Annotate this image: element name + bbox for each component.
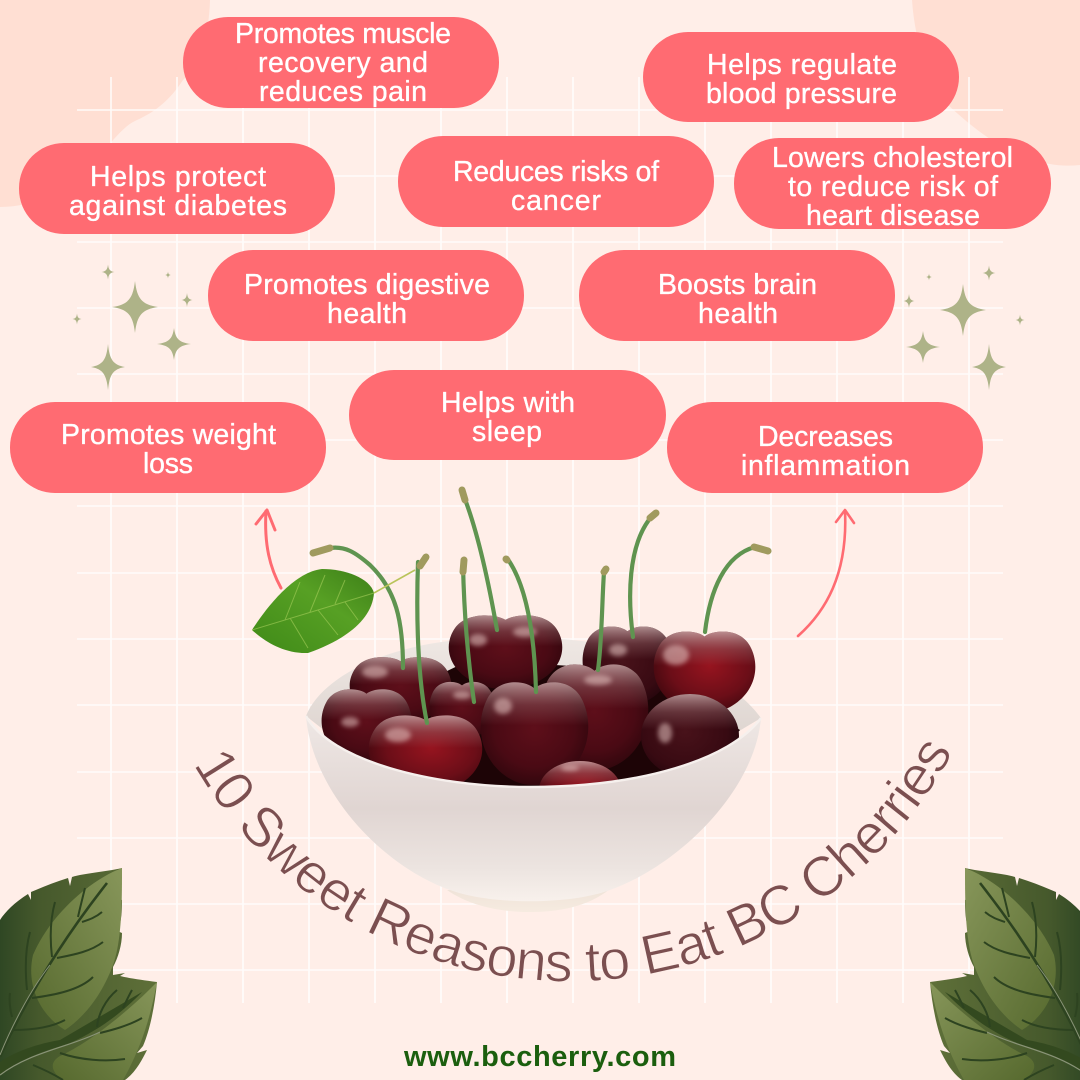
pill: diabetes: against diabetes [69,190,287,222]
pill: muscle recovery [183,17,499,108]
cherries [322,615,755,819]
bowl rim highlight [306,716,761,787]
cherry leaf [252,569,415,653]
big leaves: bottom left [0,868,157,1080]
bowl of cherries [306,615,761,912]
pill: cancer [398,136,714,227]
pill: sleep: Helps with [441,387,575,419]
pill: cholesterol: heart disease [806,200,980,232]
website url: www.bccherry.com [403,1041,676,1073]
pill: muscle recovery: reduces pain [259,76,427,108]
sparkles: right cluster [904,266,1024,390]
pill: inflammation: inflammation [741,450,910,482]
pill: cancer: cancer [511,185,602,217]
pill: inflammation [667,402,983,493]
pill: digestive [208,250,524,341]
pill: digestive: health [327,298,407,330]
decorative blob: top left [0,0,210,207]
pill: sleep [349,370,666,460]
dark gap between cherries [345,660,740,792]
arrow: left [256,510,281,588]
curved title: 10 Sweet Reasons to Eat BC Cherries [196,742,949,982]
pill: muscle recovery: recovery and [258,47,428,79]
pill: blood pressure: blood pressure [706,78,897,110]
pill: cholesterol: Lowers cholesterol [772,142,1013,174]
pill: cholesterol [734,138,1051,232]
pill: brain [579,250,895,341]
pill: digestive: Promotes digestive [244,269,490,301]
arrow: right [798,510,854,636]
pill: brain: health [698,298,778,330]
bowl body [306,716,761,901]
pill: muscle recovery: Promotes muscle [235,18,451,50]
pill: blood pressure [643,32,959,122]
pill: sleep: sleep [472,416,542,448]
pill: brain: Boosts brain [658,269,817,301]
cherry stems [313,490,768,723]
pill: weight loss [10,402,326,493]
pill: inflammation: Decreases [758,421,893,453]
cherry highlights [341,627,689,771]
bowl foot [447,888,611,912]
pill: weight loss: Promotes weight [61,419,276,451]
pill: weight loss: loss [143,448,193,480]
pill: diabetes: Helps protect [90,161,266,193]
pill: cholesterol: to reduce risk of [788,171,998,203]
decorative blob: top right [912,0,1080,166]
sparkles: left cluster [72,264,192,390]
pill: blood pressure: Helps regulate [707,49,897,81]
big leaves: bottom right [930,868,1080,1080]
bowl interior [306,637,761,790]
pill: cancer: Reduces risks of [453,156,659,188]
pill: diabetes [19,143,335,234]
